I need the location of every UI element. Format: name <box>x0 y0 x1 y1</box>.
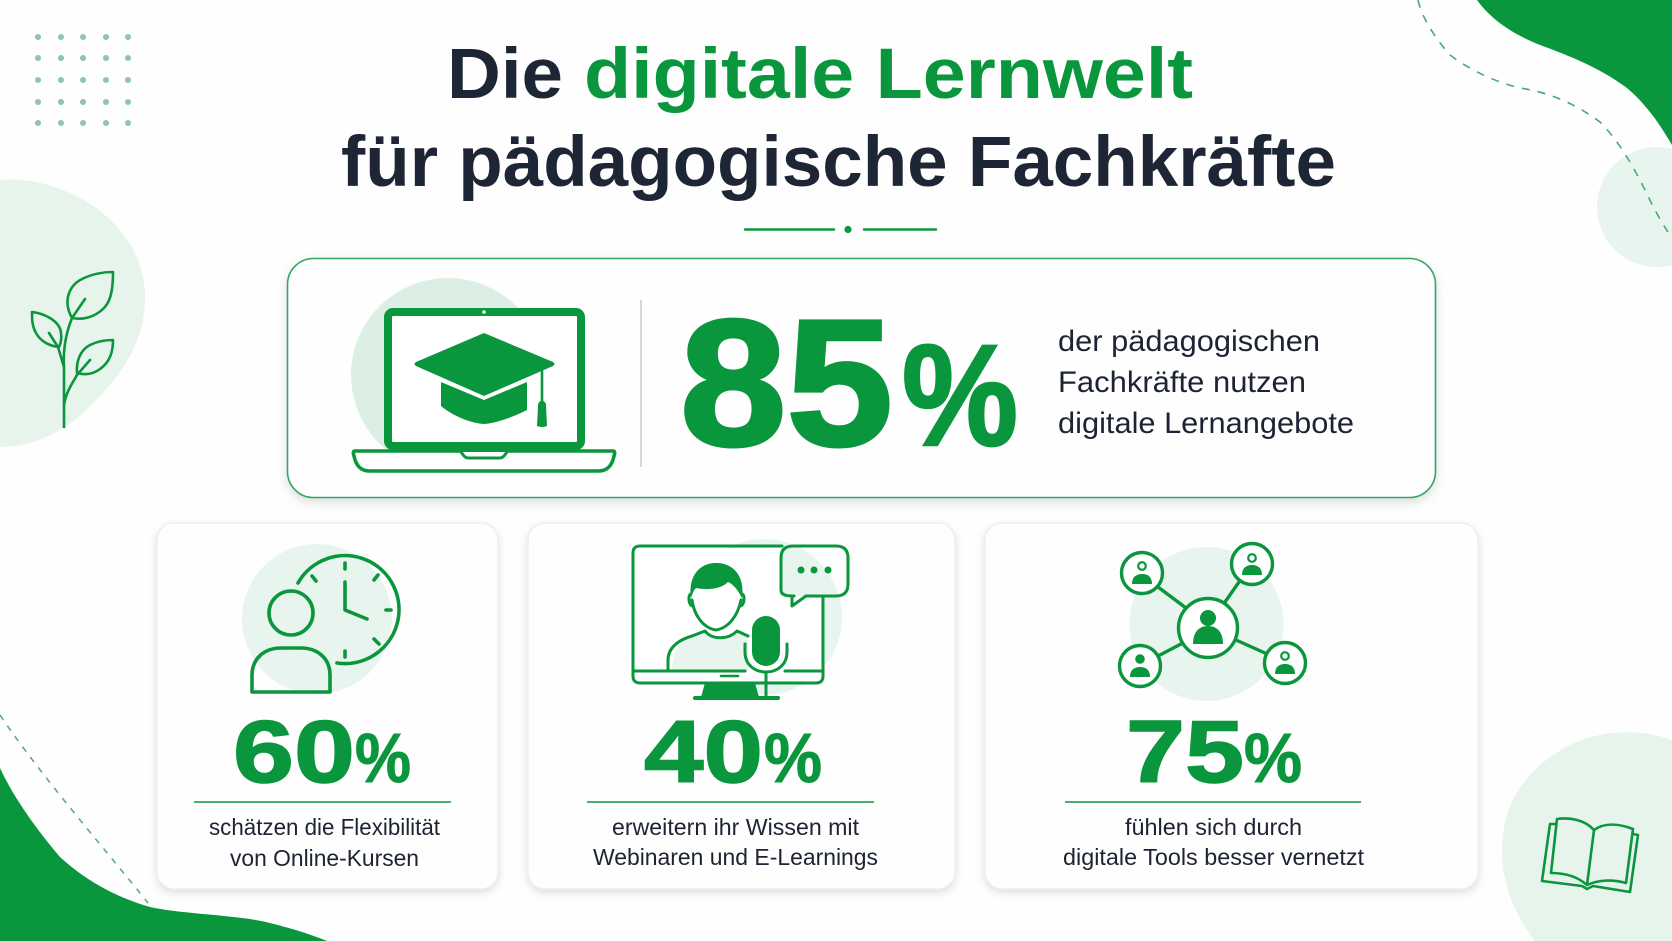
title: digitale Lernwelt <box>584 35 1193 114</box>
icon: laptop with graduation cap <box>351 278 615 472</box>
panel: webinars <box>528 523 955 889</box>
decoration: bottom-left green shape <box>0 768 327 941</box>
panel: main statistic <box>288 258 1436 498</box>
decoration: top-right dashed line <box>1418 0 1668 232</box>
description: fühlen sich durch <box>1125 814 1302 840</box>
description <box>593 814 878 870</box>
stat: 60%: % <box>355 719 411 797</box>
description <box>209 814 441 871</box>
stat: 40%: % <box>764 719 822 797</box>
icon: open book <box>1542 818 1638 892</box>
panel: flexibility <box>157 523 498 889</box>
title: für pädagogische Fachkräfte <box>341 123 1336 202</box>
stat: 60%: 60 <box>233 702 355 801</box>
stat: 40% <box>644 702 822 801</box>
description: Webinaren und E-Learnings <box>593 844 878 870</box>
decoration: left blob <box>0 179 145 447</box>
icon: video call with microphone <box>633 539 848 700</box>
decoration: bottom-right blob <box>1502 732 1672 941</box>
description <box>1063 814 1365 870</box>
stat: 40%: 40 <box>644 702 763 801</box>
stat: 75%: % <box>1244 719 1302 797</box>
title divider <box>745 226 936 233</box>
description: digitale Tools besser vernetzt <box>1063 844 1365 870</box>
stat: 75% <box>1126 702 1302 801</box>
main description: Fachkräfte nutzen <box>1058 366 1306 399</box>
description: erweitern ihr Wissen mit <box>612 814 860 840</box>
big number: 85%: % <box>902 315 1018 476</box>
description: von Online-Kursen <box>230 845 419 871</box>
stat: 75%: 75 <box>1126 702 1244 801</box>
main description: digitale Lernangebote <box>1058 407 1354 440</box>
decoration: dot grid <box>35 34 131 126</box>
title: Die <box>447 35 563 114</box>
decoration: top-right circle <box>1597 147 1672 267</box>
big number: 85% <box>680 283 1018 484</box>
main description: der pädagogischen <box>1058 325 1320 358</box>
stat: 60% <box>233 702 411 801</box>
decoration: bottom-left dashed line <box>0 715 148 903</box>
description: schätzen die Flexibilität <box>209 814 441 840</box>
icon: plant <box>32 272 113 427</box>
divider <box>640 300 642 467</box>
title <box>341 35 1336 202</box>
decoration: top-right green shape <box>1477 0 1672 145</box>
icon: people network <box>1120 544 1306 701</box>
panel: networking <box>985 523 1478 889</box>
main description <box>1058 325 1354 440</box>
big number: 85%: 85 <box>680 283 893 484</box>
icon: person and clock <box>242 544 399 694</box>
